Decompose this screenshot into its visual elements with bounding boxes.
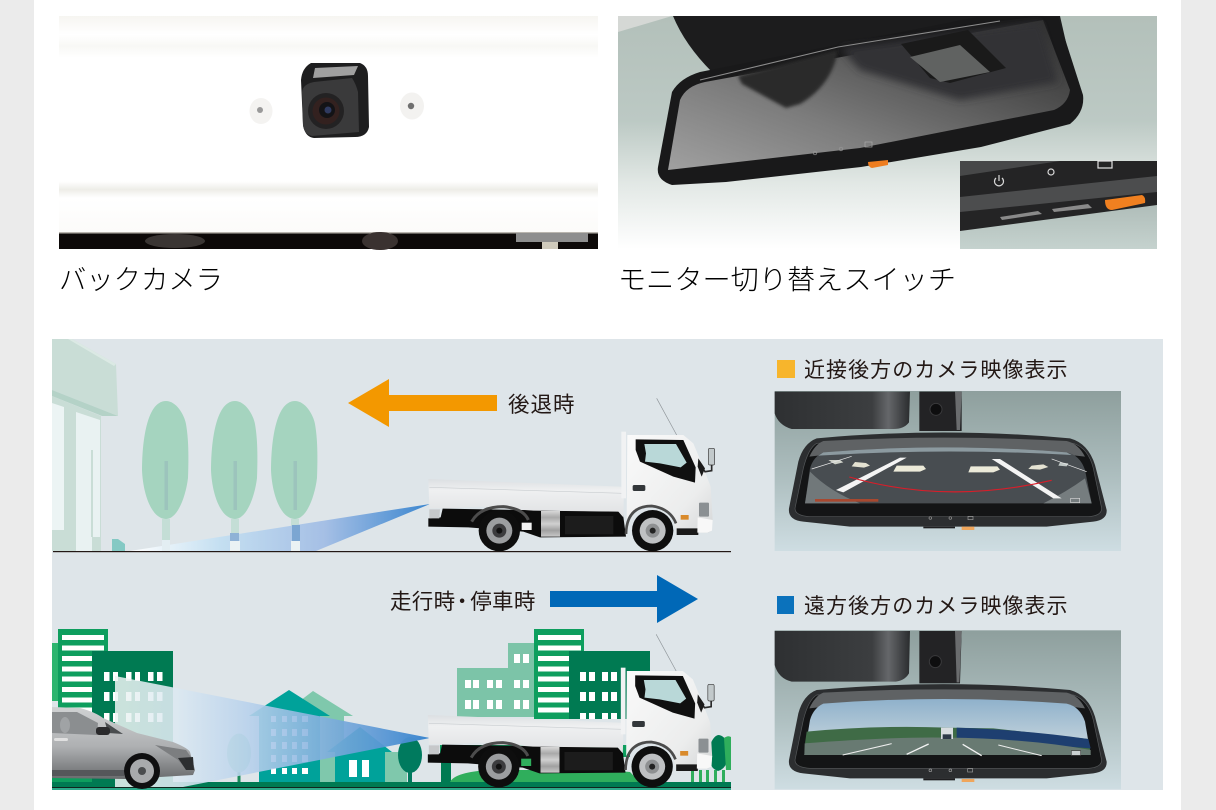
fuel tank xyxy=(565,516,613,534)
fuel tank xyxy=(564,752,613,770)
light green house xyxy=(280,691,353,782)
headboard post xyxy=(621,668,625,734)
tree 3 xyxy=(271,401,317,551)
green bracket gap xyxy=(521,759,531,766)
mirror buttons xyxy=(929,769,973,772)
mirror glass xyxy=(668,20,1070,170)
ground line: upper xyxy=(53,551,731,552)
heading: near view display: 近接後方のカメラ映像表示 xyxy=(804,359,1069,382)
left city: dark building xyxy=(92,651,173,787)
mirror buttons xyxy=(929,516,973,520)
front wheel xyxy=(632,510,673,551)
front fender xyxy=(626,506,676,534)
antenna xyxy=(657,398,677,435)
chassis xyxy=(428,509,626,537)
light tree xyxy=(227,734,251,782)
front wheel xyxy=(631,746,673,787)
photo: back camera xyxy=(59,16,598,250)
icon: camera switch xyxy=(1098,161,1112,168)
chassis xyxy=(428,745,625,773)
headlight xyxy=(699,503,709,517)
arrow: reversing direction xyxy=(348,379,497,427)
illustration: reversing scene xyxy=(52,339,430,551)
cargo bed xyxy=(428,715,623,753)
headboard post xyxy=(621,432,626,498)
rear wheel xyxy=(479,510,520,551)
dark tree xyxy=(398,737,422,782)
red guide arc xyxy=(849,477,1052,492)
antenna xyxy=(656,634,676,671)
camera beam: near view xyxy=(130,504,430,551)
teal house xyxy=(249,690,330,782)
rear fender xyxy=(471,743,528,758)
legend marker: far view xyxy=(777,596,794,614)
shrubs under truck xyxy=(440,745,640,782)
icon: left screw xyxy=(250,98,272,124)
mirror mount xyxy=(673,16,1070,72)
right city: light building xyxy=(457,643,534,717)
marker lamp xyxy=(680,751,688,756)
right city: dark building xyxy=(569,651,650,719)
door mirror xyxy=(697,684,714,713)
car xyxy=(52,707,195,789)
icon: orange switch close-up xyxy=(1105,195,1145,210)
tree 1 xyxy=(142,401,188,551)
arrow: driving direction xyxy=(550,575,698,623)
left city: bright side block xyxy=(52,643,58,701)
label: driving or stopped: 走行時・停車時 xyxy=(390,590,536,614)
tree 2 xyxy=(211,401,257,551)
icon: orange switch xyxy=(868,160,888,168)
icon: power xyxy=(995,175,1004,186)
silver box xyxy=(540,747,559,773)
car wheel xyxy=(124,753,160,789)
door handle xyxy=(632,721,645,727)
marker lamp xyxy=(681,515,689,520)
front fender xyxy=(625,742,675,770)
mirror frame xyxy=(789,432,1107,527)
right city: striped building xyxy=(534,629,584,719)
mirror tab xyxy=(901,30,1006,83)
camera beam: far view xyxy=(115,676,430,787)
silver box xyxy=(541,511,560,537)
caption: monitor switch: モニター切り替えスイッチ xyxy=(618,264,956,295)
mirror frame xyxy=(658,17,1083,185)
illustration: driving scene xyxy=(52,629,731,790)
photo: near view mirror display xyxy=(775,391,1121,551)
legend marker: near view xyxy=(777,360,795,378)
caption: back camera: バックカメラ xyxy=(59,264,223,295)
cab xyxy=(626,671,712,769)
small teal marker xyxy=(112,539,125,551)
mirror frame xyxy=(789,684,1107,778)
camera view: road xyxy=(805,447,1092,503)
right trees xyxy=(691,735,731,782)
door mirror xyxy=(698,448,715,477)
cab xyxy=(627,435,713,533)
cab window xyxy=(635,675,695,719)
front bumper xyxy=(677,528,698,535)
truck: lower xyxy=(428,634,714,787)
ground band xyxy=(52,782,731,790)
icon: brightness xyxy=(1048,169,1054,175)
headlight xyxy=(698,739,708,753)
rear fender xyxy=(472,507,528,522)
cargo bed xyxy=(428,479,624,517)
icon: camera body xyxy=(301,63,369,138)
camera view: highway xyxy=(804,699,1091,756)
panel: diagram background xyxy=(52,339,1163,790)
truck: upper xyxy=(428,398,715,551)
photo: far view mirror display xyxy=(775,630,1121,789)
cab window xyxy=(636,439,696,483)
left city: striped building xyxy=(58,629,108,782)
heading: far view display: 遠方後方のカメラ映像表示 xyxy=(804,595,1069,618)
label: reversing: 後退時 xyxy=(508,393,576,417)
building xyxy=(52,339,118,551)
inset: switch close-up xyxy=(960,161,1157,249)
photo: monitor switch mirror xyxy=(618,16,1157,249)
rear wheel xyxy=(478,746,519,787)
rear white bracket xyxy=(522,523,532,530)
front bumper xyxy=(676,764,698,771)
small house xyxy=(327,727,407,782)
icon: right screw xyxy=(400,92,424,120)
door handle xyxy=(633,485,645,491)
